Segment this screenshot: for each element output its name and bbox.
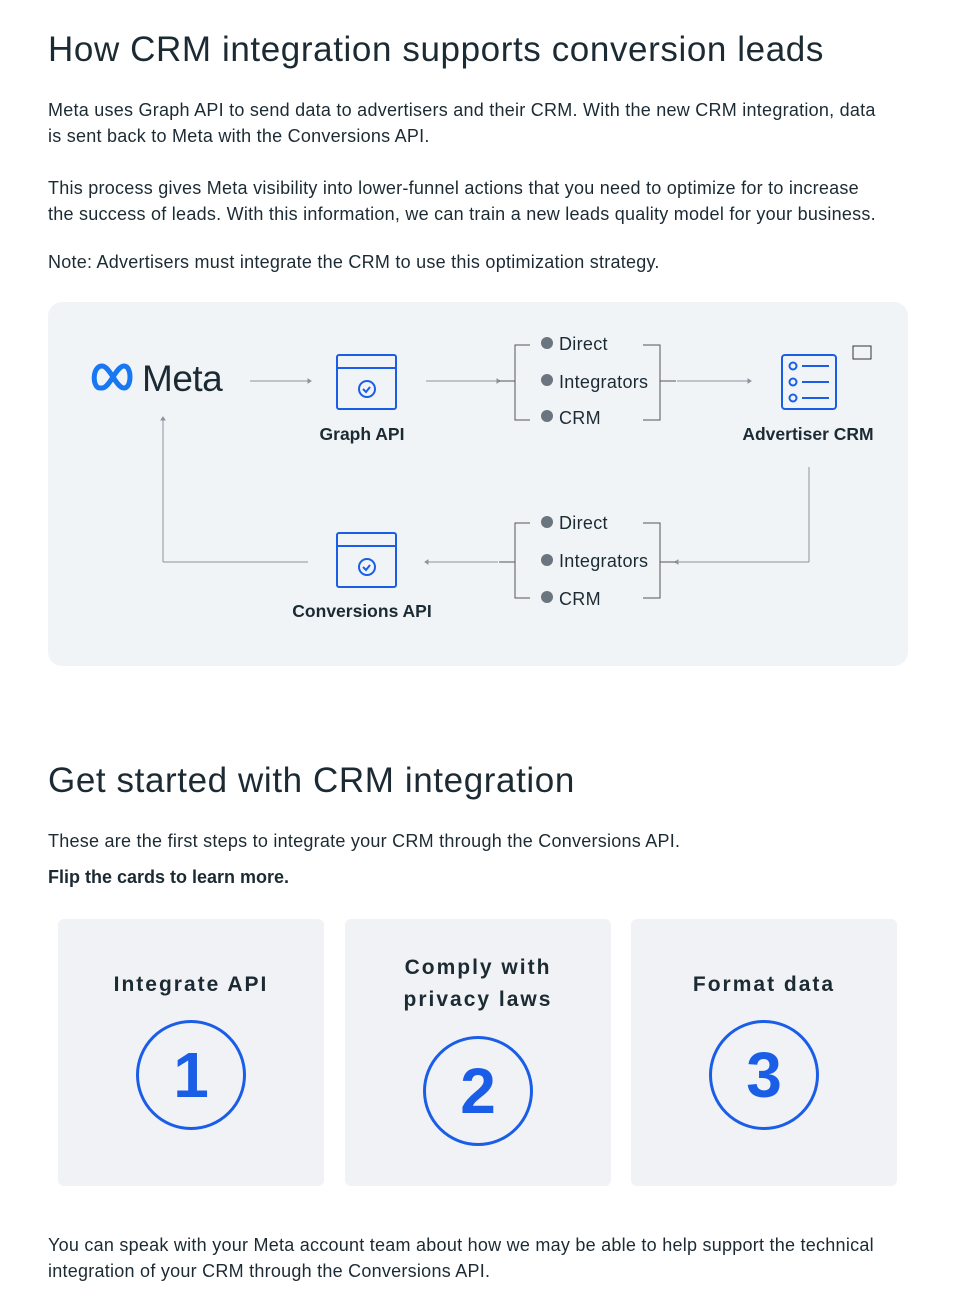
panel: diagram: Integrators	[559, 372, 648, 392]
panel: diagram: Conversions API	[292, 601, 432, 621]
card 1: 1	[173, 1039, 209, 1111]
panel: diagram: Integrators	[559, 551, 648, 571]
card 2: Comply with	[405, 956, 551, 979]
panel: diagram: Advertiser CRM	[742, 424, 874, 444]
logo: Meta: Meta	[142, 358, 223, 399]
intro text: Meta uses Graph API to send data to advertisers and their CRM. With the new CRM integration, data is sent back to Meta with the Conversions API.	[48, 100, 876, 146]
panel: diagram: Direct	[559, 513, 608, 533]
arrows	[161, 379, 809, 564]
brackets: top list	[499, 345, 676, 598]
card 1	[58, 919, 324, 1186]
card 2: privacy laws	[404, 988, 552, 1011]
panel: diagram: Graph API	[320, 424, 404, 444]
panel: diagram: CRM	[559, 589, 601, 609]
intro text 2: These are the first steps to integrate your CRM through the Conversions API.	[48, 831, 680, 851]
heading 2: Get started with CRM integration	[48, 761, 575, 800]
card 2: 2	[460, 1055, 496, 1127]
icon: Advertiser CRM	[782, 346, 871, 409]
card 3: Format data	[693, 973, 835, 996]
flip instruction: Flip the cards to learn more.	[48, 867, 289, 887]
card 3: 3	[746, 1039, 782, 1111]
note: Note: Advertisers must integrate the CRM to use this optimization strategy.	[48, 252, 660, 272]
panel: diagram: CRM	[559, 408, 601, 428]
icon: Graph API	[337, 355, 396, 409]
card 2	[345, 919, 611, 1186]
footer text: You can speak with your Meta account team about how we may be able to help support the technical integration of your CRM through the Conversions API.	[48, 1235, 874, 1281]
logo: Meta	[94, 358, 223, 399]
process text: This process gives Meta visibility into lower-funnel actions that you need to optimize for to increase the success of leads. With this information, we can train a new leads quality model for your business.	[48, 178, 876, 224]
title: How CRM integration supports conversion leads	[48, 30, 824, 69]
card 1: Integrate API	[114, 973, 268, 996]
panel: diagram: Direct	[559, 334, 608, 354]
icon: Conversions API	[337, 533, 396, 587]
panel: diagram	[48, 302, 908, 666]
card 3	[631, 919, 897, 1186]
